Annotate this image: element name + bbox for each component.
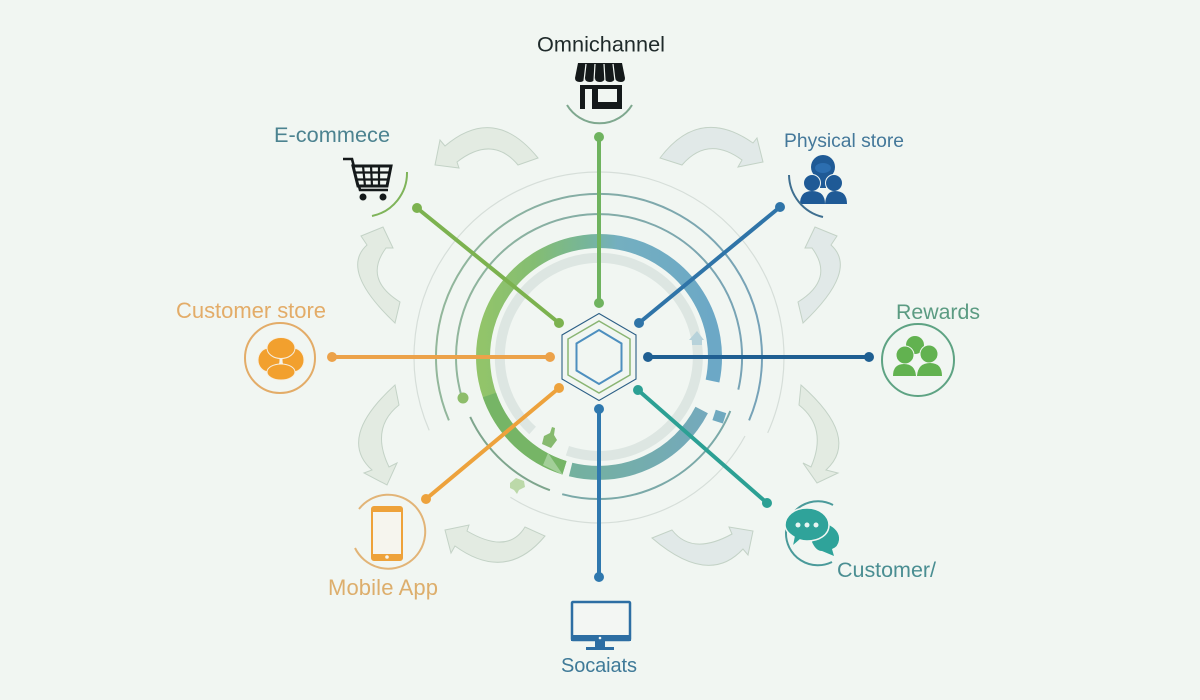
arrow: right lower: [799, 385, 839, 483]
icon arc: [567, 105, 632, 123]
spoke: physical store: [634, 202, 785, 328]
label: Customer store: Customer store: [176, 298, 326, 323]
node: Mobile App: [328, 495, 438, 600]
arrow: top left: [435, 128, 538, 168]
icon: orange badge: [245, 323, 315, 393]
spoke: rewards: [643, 352, 874, 362]
arrow: left upper: [358, 227, 400, 323]
node: Customer store: [176, 298, 326, 393]
arrow: left lower: [359, 385, 399, 485]
label: Customer/: Customer/: [837, 558, 936, 582]
arrow: right upper: [798, 227, 840, 323]
node: Customer/: [785, 501, 936, 582]
arrow: top right: [660, 127, 763, 167]
icon arc: [789, 175, 823, 217]
icon: people: [800, 155, 847, 204]
label: Physical store: Physical store: [784, 131, 904, 152]
node: Physical store: [784, 131, 904, 217]
node: Omnichannel: [537, 32, 665, 123]
node: Rewards: [882, 300, 980, 396]
icon: phone: [372, 507, 402, 560]
spoke: mobile app: [421, 383, 564, 504]
node: Socaiats: [561, 602, 637, 677]
node: E-commece: [274, 122, 407, 216]
icon: chat bubbles: [785, 501, 839, 565]
central hexagon: [562, 314, 636, 400]
arrow: bottom left: [445, 525, 545, 562]
icon: store: [575, 63, 625, 109]
icon arc: [372, 172, 407, 216]
spoke: customer store: [327, 352, 555, 362]
spoke: customer: [633, 385, 772, 508]
label: Socaiats: Socaiats: [561, 655, 637, 677]
icon: green people: [882, 324, 954, 396]
circular flow arrows: [358, 127, 840, 565]
icon: shopping cart: [343, 159, 391, 200]
icon arc: [355, 495, 425, 569]
spoke: socaiats: [594, 404, 604, 582]
label: E-commece: E-commece: [274, 122, 390, 147]
label: Rewards: Rewards: [896, 300, 980, 324]
label: Omnichannel: Omnichannel: [537, 32, 665, 56]
spoke: omnichannel: [594, 132, 604, 308]
concentric rings: [414, 172, 784, 523]
ring fragments: [458, 331, 726, 494]
arrow: bottom right: [652, 527, 753, 565]
spokes: [327, 132, 874, 582]
icon: monitor: [571, 602, 631, 650]
label: Mobile App: Mobile App: [328, 575, 438, 600]
spoke: e-commerce: [412, 203, 564, 328]
